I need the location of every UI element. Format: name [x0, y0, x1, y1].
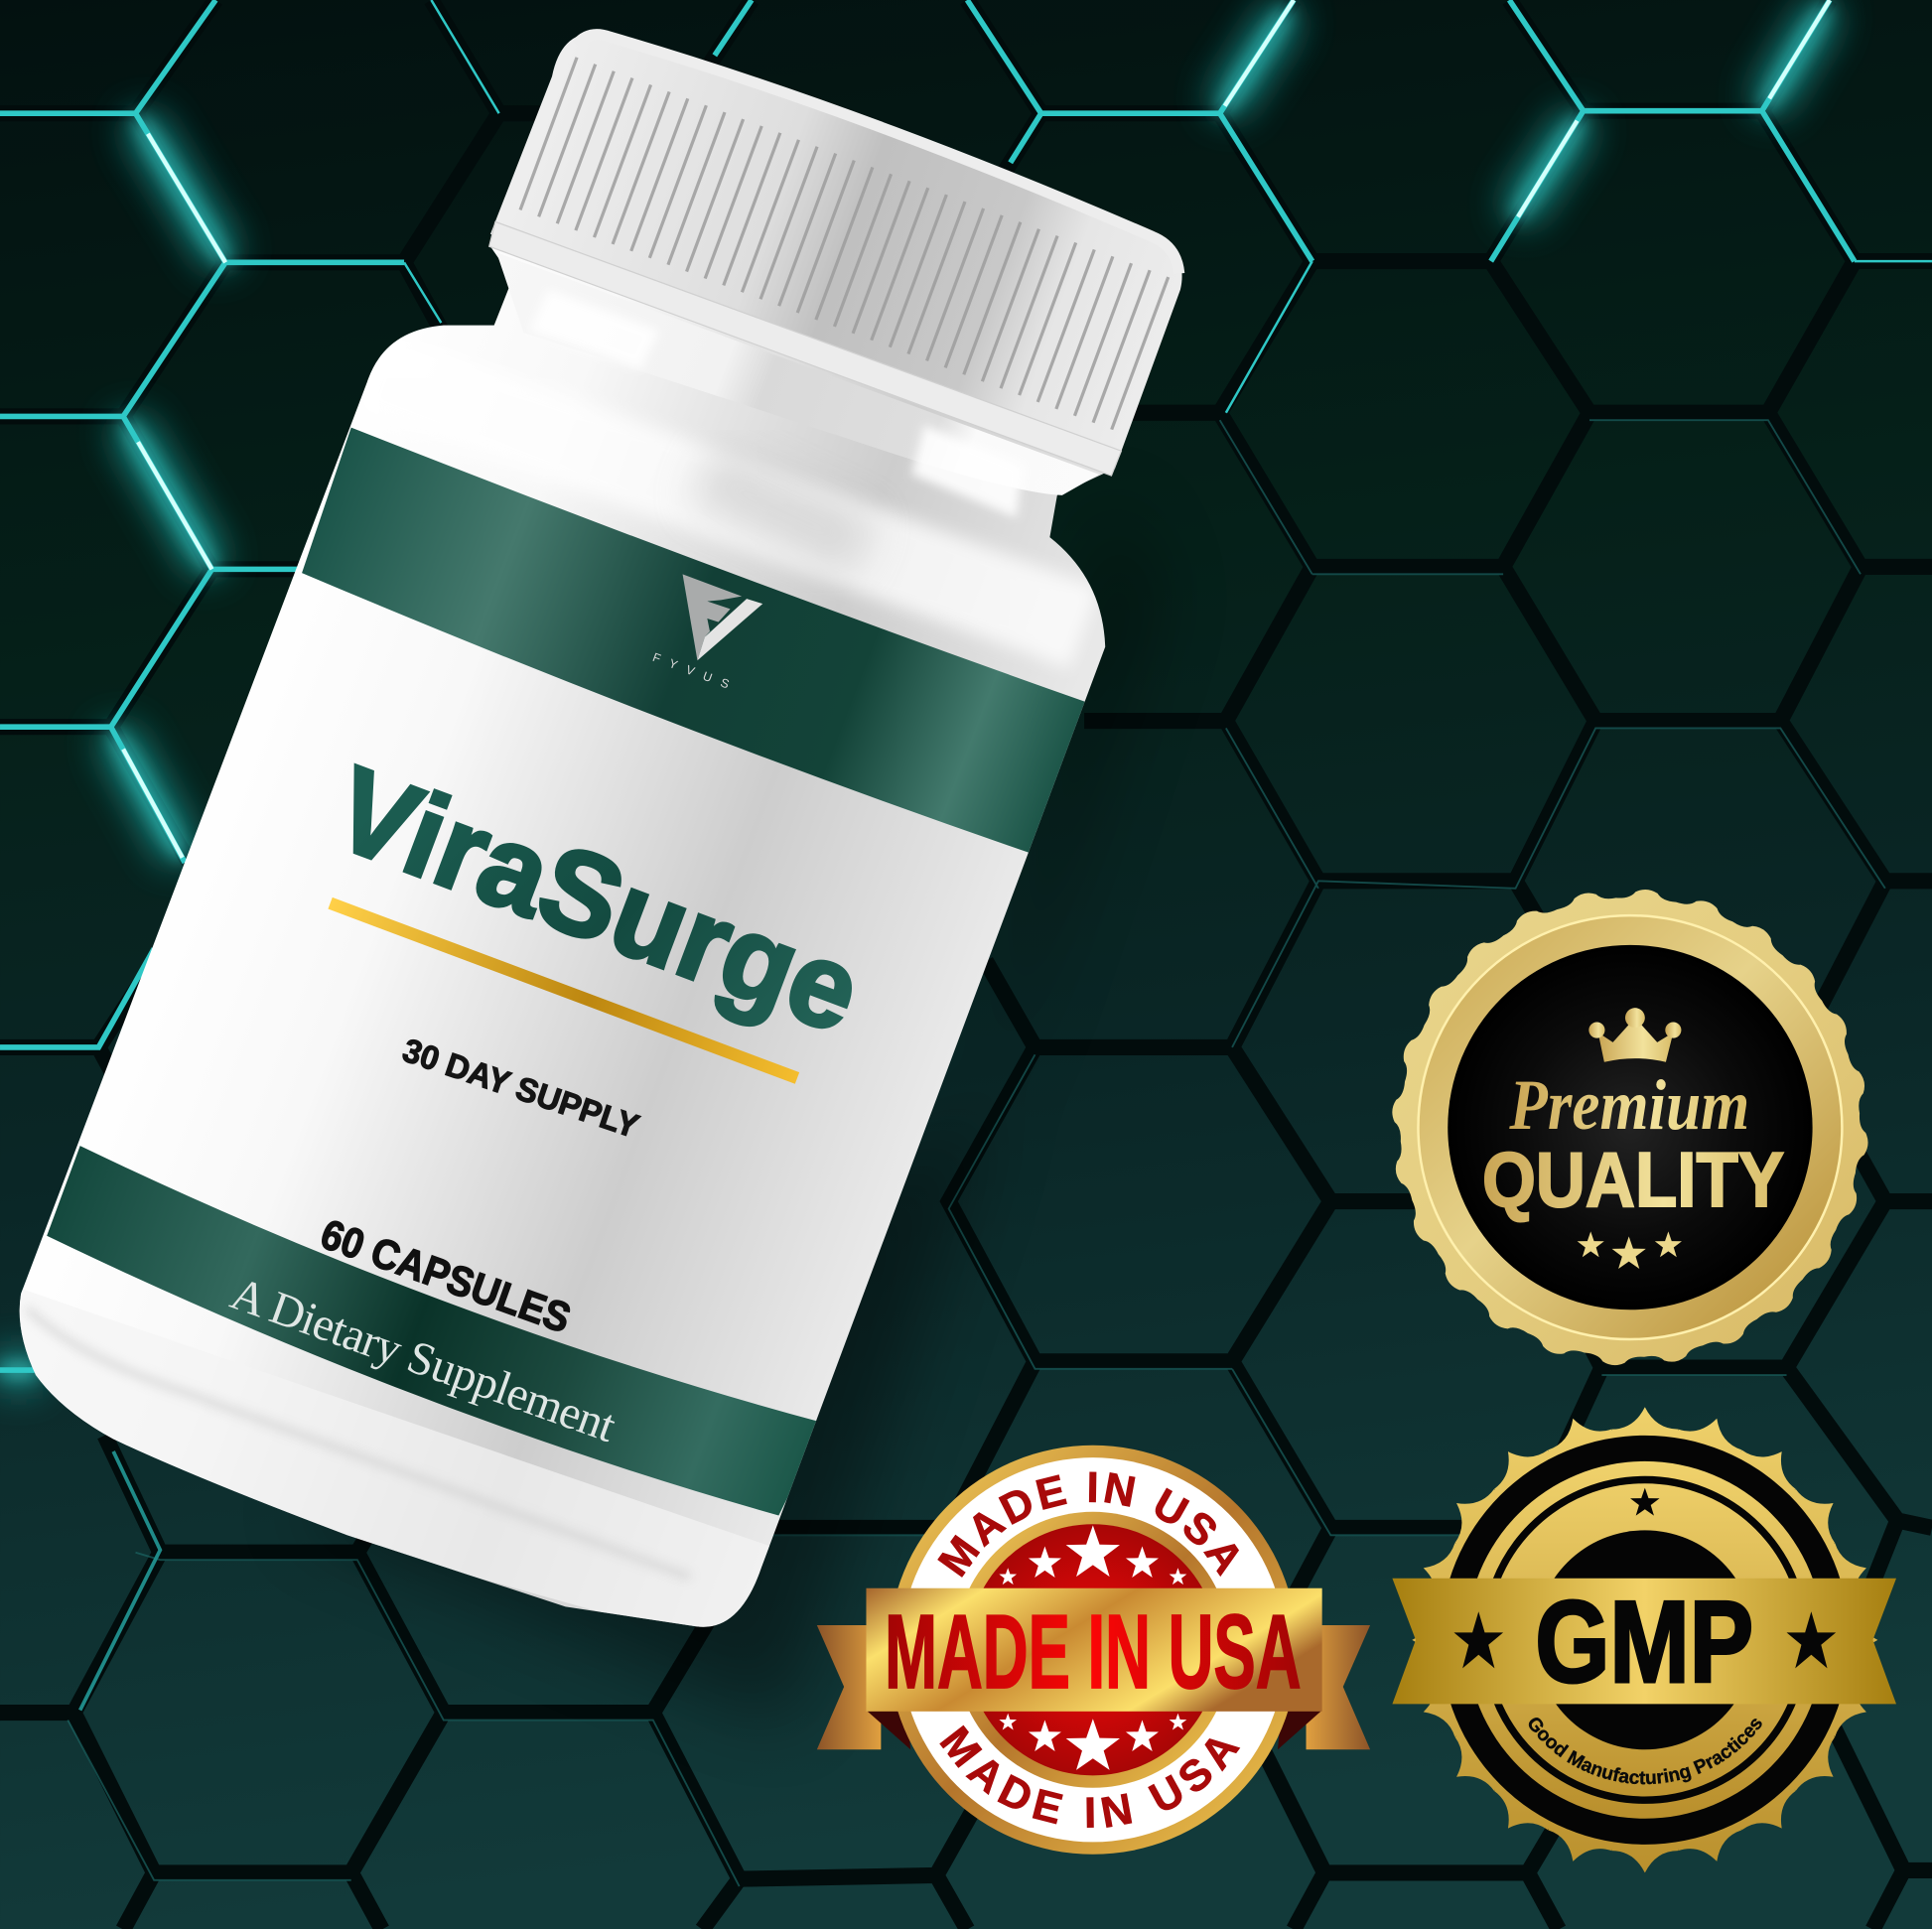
serrated edge — [1405, 1399, 1885, 1881]
bottom green band — [47, 1146, 824, 1516]
ribbon tails — [817, 1625, 1370, 1749]
premium script: Premium — [1508, 1065, 1749, 1145]
glowing neon edges — [0, 0, 1932, 1370]
stars — [999, 1525, 1186, 1770]
white ring — [900, 1457, 1285, 1842]
top star — [1630, 1488, 1660, 1516]
curved caption: Good Manufacturing Practices — [1529, 1718, 1762, 1785]
gold ring — [1418, 915, 1842, 1339]
brand name: ViraSurge — [318, 742, 877, 1058]
supplement label: A Dietary Supplement — [224, 1268, 622, 1452]
cap — [489, 33, 1182, 476]
scalloped edge — [1380, 878, 1880, 1378]
cap ribs — [547, 133, 1151, 357]
black center — [1535, 1530, 1754, 1749]
curved text bottom: MADE IN USA — [939, 1725, 1241, 1828]
inner glow — [0, 6, 1826, 1370]
neck highlights — [530, 290, 1023, 517]
banner text: MADE IN USA — [885, 1594, 1302, 1711]
capsule count: 60 CAPSULES — [315, 1210, 577, 1341]
outer glow halos — [0, 6, 1826, 1370]
white hot cores — [123, 0, 1830, 858]
gold ring — [1466, 1461, 1824, 1819]
black ring — [1441, 1436, 1850, 1845]
bottle neck — [496, 252, 1099, 495]
red disc — [967, 1524, 1218, 1775]
outer ring — [889, 1446, 1298, 1855]
inner gold ring — [955, 1512, 1231, 1788]
product bottle — [0, 33, 1182, 1651]
thin lines — [404, 0, 1932, 413]
bottle body — [20, 246, 1115, 1627]
gold banner — [866, 1588, 1322, 1712]
three stars — [1578, 1231, 1682, 1269]
top green band — [302, 428, 1087, 853]
cap top edge — [577, 35, 1179, 274]
badge: premium quality — [1380, 878, 1880, 1378]
crown — [1588, 1008, 1681, 1062]
ribbon folds — [866, 1711, 1322, 1749]
cap rim — [489, 221, 1121, 476]
logo wordmark: FYVUS — [650, 650, 741, 695]
badge: GMP — [1392, 1407, 1896, 1872]
GMP text: GMP — [1535, 1577, 1753, 1707]
black disc — [1448, 945, 1813, 1309]
supply label: 30 DAY SUPPLY — [398, 1033, 643, 1146]
logo mark — [683, 574, 762, 660]
thin ring — [1484, 1480, 1805, 1800]
cap shell — [490, 33, 1182, 469]
bottle shadow — [296, 492, 1159, 1724]
bottle shading — [0, 369, 1084, 1651]
badge: made in usa — [816, 1446, 1370, 1855]
bright lines — [0, 0, 1855, 1370]
logo: FYVUS — [650, 574, 762, 695]
quality word: QUALITY — [1482, 1136, 1784, 1223]
gold banner — [1392, 1579, 1896, 1704]
banner stars — [1453, 1611, 1836, 1668]
gold underline — [331, 903, 797, 1078]
curved text top: MADE IN USA — [937, 1471, 1239, 1578]
